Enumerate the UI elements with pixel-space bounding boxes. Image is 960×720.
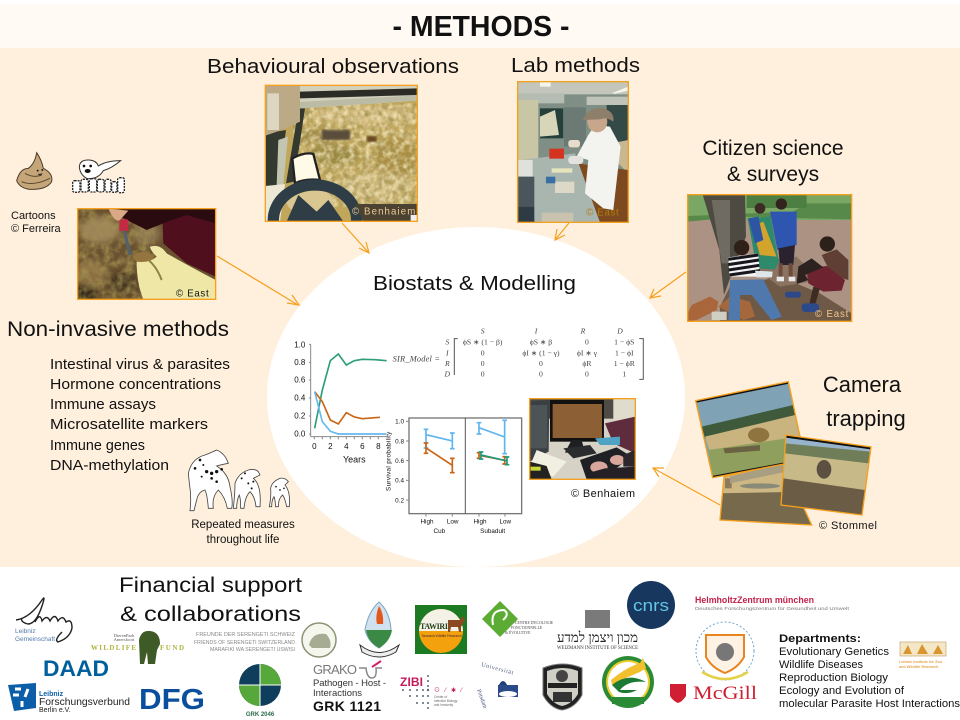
icon: adult hyena bbox=[188, 450, 232, 511]
equation: SIR model matrix: D bbox=[444, 370, 451, 379]
logo: ZIBI: ZIBI bbox=[400, 675, 423, 689]
heading: biostats and modelling: Biostats & Modelling bbox=[373, 272, 576, 295]
logo: GRK 2046 bbox=[239, 664, 281, 718]
heading: financial support and collaborations: & collaborations bbox=[120, 602, 301, 626]
equation: SIR model matrix: 0 bbox=[585, 370, 589, 379]
chart: SIR model trajectories: 0.4 bbox=[294, 394, 306, 403]
caption: repeated measures: throughout life bbox=[207, 534, 279, 546]
heading: financial support and collaborations: Financial support bbox=[119, 573, 302, 597]
equation: SIR model matrix: SIR_Model = bbox=[393, 354, 440, 363]
logo: ZIBI: Infection Biology bbox=[434, 699, 458, 703]
heading: behavioural observations: Behavioural observations bbox=[207, 55, 459, 78]
logo: ZIBI: Center of bbox=[434, 695, 447, 699]
logo: Friends of Serengeti: MARAFIKI WA SERENGETI USWISI bbox=[210, 647, 295, 653]
chart: survival probability: Low bbox=[447, 518, 459, 525]
text block: departments: Departments: bbox=[779, 633, 861, 645]
equation: SIR model matrix: R bbox=[444, 359, 450, 368]
chart: SIR model trajectories: 0.0 bbox=[294, 430, 306, 439]
photo: trap back bbox=[719, 464, 813, 526]
logo: GRK 2046: GRK 2046 bbox=[246, 712, 275, 718]
title band bbox=[0, 4, 960, 48]
credit: © East bbox=[176, 288, 209, 299]
logo: Wildlife Fund: FUND bbox=[160, 644, 184, 652]
equation: SIR model matrix: S bbox=[481, 327, 485, 336]
credit: © East bbox=[815, 309, 849, 320]
logo: GRK 1121: GRK 1121 bbox=[313, 698, 381, 714]
photo: non-invasive sampling bbox=[70, 209, 216, 302]
logo: ZIBI: and Immunity bbox=[434, 703, 454, 707]
logo: Helmholtz Zentrum bbox=[695, 595, 850, 611]
credit: © East bbox=[586, 207, 619, 218]
logo: Centre d'Ecologie: CENTRE D'ECOLOGIE bbox=[515, 621, 554, 625]
equation: SIR model matrix: ϕR bbox=[582, 359, 592, 368]
icon: cartoon parasites bbox=[73, 160, 124, 193]
equation: SIR model matrix: R bbox=[580, 327, 586, 336]
logo: Forschungsverbund Berlin bbox=[8, 683, 130, 714]
equation: SIR model matrix: ϕS ∗ β bbox=[530, 338, 552, 347]
logo: Wildlife Fund: DierenPark bbox=[114, 633, 135, 638]
logo: ZIBI: ⊙ ⁄ ✱ ⁄ bbox=[434, 687, 463, 694]
chart: survival probability: 0.4 bbox=[395, 478, 404, 485]
logo: Forschungsverbund Berlin: Forschungsverbund bbox=[39, 696, 130, 708]
icon: cartoon dropping bbox=[17, 153, 52, 189]
logo: GRK 1121: GRAKO bbox=[313, 662, 357, 677]
chart: SIR model trajectories: 0.2 bbox=[294, 412, 306, 421]
logo: University of Dodoma bbox=[696, 622, 754, 680]
arrow: non-invasive to modelling bbox=[217, 256, 299, 305]
equation: SIR model matrix: D bbox=[616, 327, 623, 336]
logo: CNRS bbox=[627, 581, 675, 629]
caption: repeated measures: Repeated measures bbox=[191, 519, 295, 531]
heading: financial support and collaborations bbox=[119, 573, 302, 626]
text block: departments: Ecology and Evolution of bbox=[779, 685, 905, 697]
credit: computer photo: © Benhaiem bbox=[571, 488, 635, 500]
chart: SIR model trajectories: 1.0 bbox=[294, 340, 306, 349]
chart: SIR model trajectories: 4 bbox=[344, 442, 349, 451]
logo: Forschungsverbund Berlin: Berlin e.V. bbox=[39, 707, 71, 714]
arrow: camera traps to modelling bbox=[653, 468, 720, 505]
chart: survival probability: Subadult bbox=[480, 528, 505, 535]
credit: cartoons: Cartoons bbox=[11, 210, 56, 222]
equation: SIR model matrix: I bbox=[445, 348, 449, 357]
equation: SIR model matrix: 1 − ϕR bbox=[614, 359, 636, 368]
cartoons: faeces and parasite bbox=[17, 153, 124, 193]
list: non-invasive methods: Immune genes bbox=[50, 438, 145, 454]
logo: Wildlife Fund: WILDLIFE bbox=[91, 644, 136, 652]
logo: Helmholtz Zentrum: Deutsches Forschungszentrum für Gesundheit und Umwelt bbox=[695, 606, 850, 611]
chart: survival probability: 0.8 bbox=[395, 438, 404, 445]
logo: Centre d'Ecologie: FONCTIONNELLE bbox=[511, 626, 543, 630]
chart: survival probability: Low bbox=[500, 518, 512, 525]
heading: camera trapping: Camera bbox=[823, 372, 902, 397]
arrow: behaviour to modelling bbox=[342, 223, 369, 253]
central white ellipse bbox=[267, 227, 685, 567]
photo: citizen science bbox=[688, 195, 852, 321]
logo: TAWIRI bbox=[415, 605, 467, 654]
chart: survival probability: 1.0 bbox=[395, 419, 404, 426]
photo: lab methods bbox=[518, 82, 628, 222]
logo: Helmholtz Zentrum: HelmholtzZentrum münchen bbox=[695, 595, 814, 605]
chart: survival probability: Cub bbox=[434, 528, 446, 535]
logo: DAAD: DAAD bbox=[43, 656, 109, 681]
logo: Weizmann Institute: WEIZMANN INSTITUTE OF SCIENCE bbox=[557, 646, 638, 651]
logo: TAWIRI: Tanzania Wildlife Research bbox=[421, 634, 462, 638]
heading: non-invasive methods: Non-invasive methods bbox=[7, 317, 229, 341]
logo: Leibniz Gemeinschaft: Gemeinschaft bbox=[15, 636, 55, 643]
arrow: lab to modelling bbox=[555, 223, 569, 240]
logo: GRK 1121 bbox=[313, 661, 386, 714]
equation: SIR model matrix: ϕI ∗ (1 − γ) bbox=[522, 348, 560, 357]
logo: Centre d'Ecologie bbox=[482, 601, 554, 637]
photo: computer work bbox=[530, 399, 635, 479]
equation: SIR model matrix: 0 bbox=[539, 359, 543, 368]
list: non-invasive methods: Intestinal virus & parasites bbox=[50, 357, 230, 373]
chart: survival probability: High bbox=[420, 518, 434, 525]
equation: SIR model matrix: S bbox=[445, 337, 449, 346]
credit: © Benhaiem bbox=[352, 207, 415, 218]
logo: Leibniz Institute for Zoo and Wildlife Research: Leibniz Institute for Zoo bbox=[899, 660, 943, 664]
list: non-invasive methods: Immune assays bbox=[50, 397, 156, 413]
chart: SIR model trajectories: 8 bbox=[376, 442, 381, 451]
chart: SIR model trajectories: Years bbox=[343, 454, 366, 464]
list: non-invasive methods: Microsatellite markers bbox=[50, 417, 208, 433]
equation: SIR model matrix: 0 bbox=[481, 359, 485, 368]
logo: TAWIRI: TAWIRI bbox=[420, 622, 448, 631]
text block: departments: Evolutionary Genetics bbox=[779, 646, 889, 658]
equation: SIR model matrix: I bbox=[534, 327, 538, 336]
icon: cub hyena bbox=[269, 478, 290, 507]
logo: Leibniz Institute for Zoo and Wildlife Research bbox=[899, 642, 946, 669]
text block: departments: Wildlife Diseases bbox=[779, 659, 863, 671]
logo: Weizmann Institute: מכון ויצמן למדע bbox=[557, 630, 638, 646]
logo: CNRS: cnrs bbox=[633, 596, 669, 615]
logo: Universität Potsdam: Universität bbox=[480, 662, 514, 677]
equation: SIR model matrix: 0 bbox=[481, 370, 485, 379]
panel: methods background bbox=[0, 48, 960, 567]
title: - METHODS - bbox=[392, 11, 570, 43]
equation: SIR model matrix bbox=[393, 327, 643, 379]
logo: DFG: DFG bbox=[139, 684, 205, 716]
chart: SIR model trajectories bbox=[287, 333, 391, 464]
chart: survival probability: High bbox=[473, 518, 487, 525]
text block: departments bbox=[779, 633, 960, 710]
logo: Tanzania National Parks bbox=[602, 656, 654, 708]
logo: McGill bbox=[670, 683, 757, 704]
text block: departments: molecular Parasite Host Interactions bbox=[779, 698, 960, 710]
photo group: camera traps bbox=[696, 382, 871, 527]
arrow: citizen science to modelling bbox=[650, 272, 686, 298]
chart: SIR model trajectories: 6 bbox=[360, 442, 365, 451]
logo: Universität Potsdam: Potsdam bbox=[475, 689, 488, 710]
text block: departments: Reproduction Biology bbox=[779, 672, 888, 684]
logo: COSTECH bbox=[543, 664, 582, 710]
logo: Tanzanian crest bbox=[360, 602, 399, 657]
equation: SIR model matrix: 1 − ϕI bbox=[615, 348, 634, 357]
equation: SIR model matrix: ϕS ∗ (1 − β) bbox=[463, 338, 503, 347]
illustration: hyenas bbox=[188, 450, 290, 511]
logo: GRK 1121: Interactions bbox=[313, 688, 362, 699]
logo: Forschungsverbund Berlin: Leibniz bbox=[39, 691, 64, 698]
logo: Friends of Serengeti: FREUNDE DER SERENGETI SCHWEIZ bbox=[196, 632, 295, 638]
logo: Universität Potsdam bbox=[475, 662, 518, 710]
equation: SIR model matrix: 0 bbox=[585, 338, 589, 347]
chart: survival probability: Survival probability bbox=[386, 431, 393, 491]
chart: SIR model trajectories: 0 bbox=[312, 442, 317, 451]
logo: Friends of Serengeti bbox=[194, 623, 336, 657]
chart: SIR model trajectories: 2 bbox=[328, 442, 333, 451]
list: non-invasive methods bbox=[50, 357, 230, 474]
chart: survival probability: 0.2 bbox=[395, 497, 404, 504]
equation: SIR model matrix: 0 bbox=[481, 348, 485, 357]
equation: SIR model matrix: 0 bbox=[539, 370, 543, 379]
heading: lab methods: Lab methods bbox=[511, 54, 640, 77]
equation: SIR model matrix: ϕI ∗ γ bbox=[577, 348, 598, 357]
equation: SIR model matrix: 1 bbox=[622, 370, 626, 379]
chart: survival probability bbox=[386, 382, 527, 535]
photo: trap front right bbox=[781, 435, 871, 515]
logo: Centre d'Ecologie: & ÉVOLUTIVE bbox=[505, 630, 531, 635]
icon: juvenile hyena bbox=[233, 469, 260, 508]
logo: Friends of Serengeti: FRIENDS OF SERENGETI SWITZERLAND bbox=[194, 640, 295, 646]
logo: ZIBI bbox=[400, 675, 463, 709]
list: non-invasive methods: DNA-methylation bbox=[50, 458, 169, 474]
logo: Leibniz Gemeinschaft bbox=[15, 598, 72, 643]
chart: SIR model trajectories: 0.8 bbox=[294, 358, 306, 367]
photo: trap upper left bbox=[696, 382, 805, 478]
chart: SIR model trajectories: 0.6 bbox=[294, 376, 306, 385]
heading: citizen science and surveys: & surveys bbox=[727, 163, 819, 186]
heading: camera trapping: trapping bbox=[826, 406, 906, 431]
logo: Weizmann Institute bbox=[557, 610, 638, 651]
heading: citizen science and surveys: Citizen science bbox=[702, 137, 844, 160]
logo: Leibniz Gemeinschaft: Leibniz bbox=[15, 628, 36, 635]
logo: Wildlife Fund bbox=[91, 631, 184, 664]
logo: McGill: McGill bbox=[693, 683, 757, 704]
logo: Leibniz Institute for Zoo and Wildlife Research: and Wildlife Research bbox=[899, 665, 939, 669]
chart: survival probability: 0.6 bbox=[395, 458, 404, 465]
equation: SIR model matrix: 1 − ϕS bbox=[614, 338, 634, 347]
list: non-invasive methods: Hormone concentrations bbox=[50, 377, 221, 393]
credit: cartoons: © Ferreira bbox=[11, 223, 62, 235]
logo: GRK 1121: Pathogen - Host - bbox=[313, 678, 386, 689]
photo: behavioural observations bbox=[264, 84, 418, 222]
logo: Wildlife Fund: Amersfoort bbox=[114, 637, 135, 642]
credit: camera traps: © Stommel bbox=[819, 520, 877, 532]
